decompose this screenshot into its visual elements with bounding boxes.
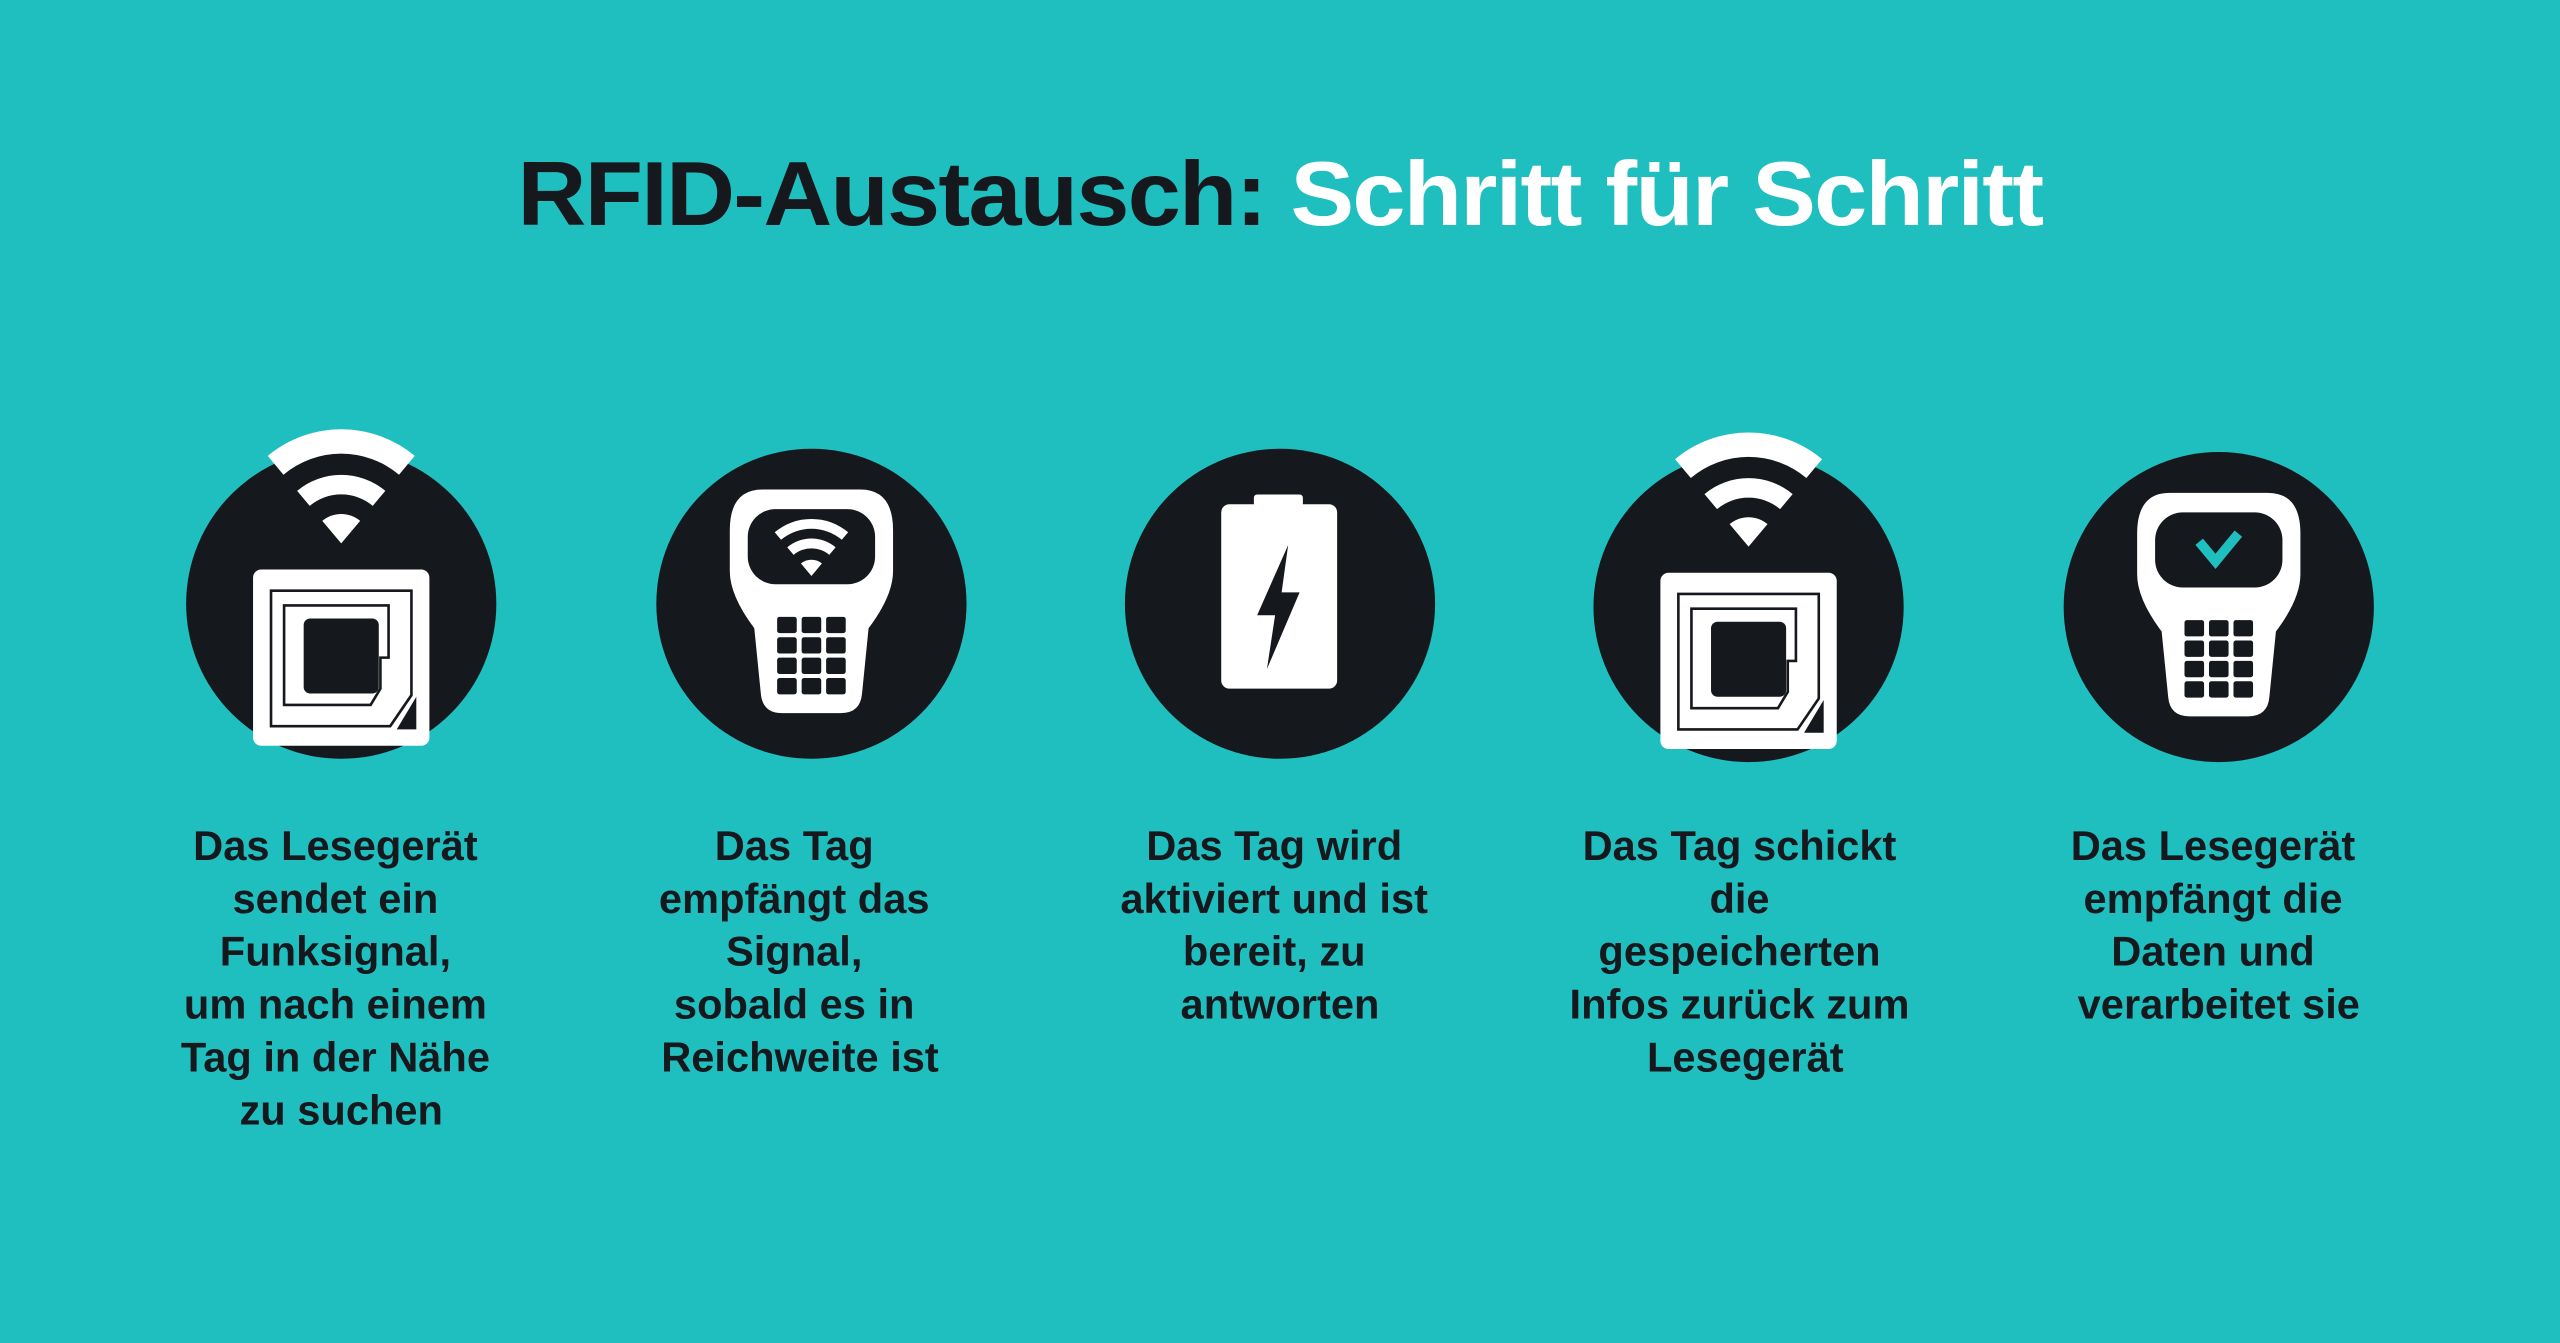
text: step 1: Das Lesegerät [193,822,478,869]
text: step 2: Reichweite ist [661,1033,939,1080]
text: step 3: Das Tag wird [1146,822,1402,869]
text: step 5: Das Lesegerät [2071,822,2355,869]
text: step 1: Tag in der Nähe [181,1033,490,1080]
text: step 1: zu suchen [239,1086,443,1133]
text: step 3: aktiviert und ist [1120,875,1428,922]
step 4: tag sends data back [1570,432,1921,1080]
text: step 2: Das Tag [715,822,874,869]
text: step 2: Signal, [726,928,862,975]
step 1: reader sends signal [181,429,502,1133]
text: step 2: sobald es in [674,981,914,1028]
text: step 4: Das Tag schickt [1583,822,1897,869]
step 5: reader processes data [2064,452,2374,1028]
text: step 2: empfängt das [659,875,930,922]
text: step 4: die [1709,875,1770,922]
step 3: tag activated [1120,449,1440,1028]
text: step 1: Funksignal, [220,928,451,975]
text: step 1: sendet ein [233,875,438,922]
icon: tag with outgoing signal [186,429,496,759]
text: step 4: gespeicherten [1598,928,1881,975]
text: step 4: Infos zurück zum [1570,981,1909,1028]
title: RFID-Austausch: Schritt für Schritt [518,143,2044,245]
icon: reader with signal [656,449,967,759]
step 2: tag receives signal [656,449,967,1080]
text: step 5: verarbeitet sie [2078,981,2360,1028]
text: step 3: antworten [1181,981,1379,1028]
text: step 1: um nach einem [184,981,487,1028]
icon: battery with bolt [1125,449,1435,759]
text: step 5: empfängt die [2083,875,2342,922]
text: step 5: Daten und [2111,928,2315,975]
text: step 4: Lesegerät [1647,1033,1844,1080]
text: step 3: bereit, zu [1183,928,1366,975]
icon: reader with check [2064,452,2374,762]
icon: tag with signal [1593,432,1904,762]
